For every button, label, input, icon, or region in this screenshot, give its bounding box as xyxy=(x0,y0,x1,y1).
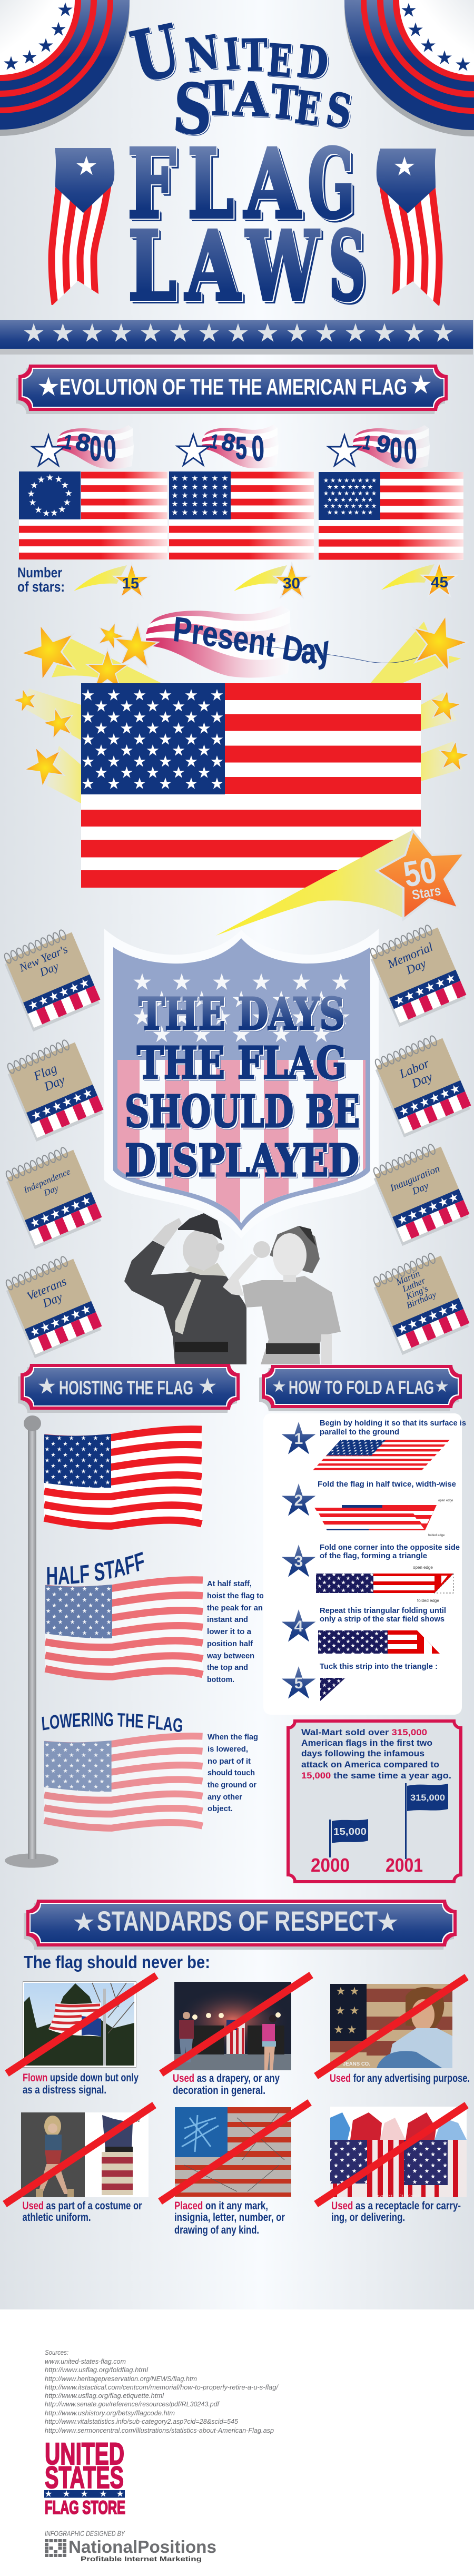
step 2: 2 xyxy=(294,1492,303,1509)
lowering the flag heading xyxy=(42,1713,203,1758)
left corner bunting xyxy=(0,0,130,136)
heading: standards of respect xyxy=(24,1900,457,1950)
title: Laws: A xyxy=(185,211,241,322)
panel: how to fold a flag xyxy=(263,1413,466,1715)
number of stars label: Number xyxy=(17,565,62,581)
half staff text: way between xyxy=(206,1651,254,1660)
designer credit: NationalPositions xyxy=(68,2537,216,2557)
callout: wal-mart flag sales xyxy=(288,1721,461,1882)
heading: how to fold a flag xyxy=(259,1365,462,1411)
notepad: Memorial Day xyxy=(367,922,468,1027)
half staff text: the peak for an xyxy=(207,1604,263,1613)
subheading: the flag should never be: The flag should never be: xyxy=(24,1952,210,1972)
notepad: Inauguration Day: Day xyxy=(410,1181,431,1197)
notepad: Independence Day: Independence xyxy=(22,1166,72,1195)
notepad: Inauguration Day: Inauguration xyxy=(388,1163,441,1194)
title: United States: S xyxy=(171,67,215,151)
sources list: http://www.ushistory.org/betsy/flagcode.htm xyxy=(45,2409,175,2417)
waving flag: hoisting xyxy=(44,1425,202,1530)
shooting star 30: 30 xyxy=(283,575,300,592)
step 1 xyxy=(282,1419,466,1470)
step 4 xyxy=(282,1606,446,1654)
half staff text xyxy=(206,1579,264,1684)
half staff text: hoist the flag to xyxy=(207,1591,264,1600)
photo: receptacle xyxy=(330,2107,467,2199)
flag pole xyxy=(5,1415,58,1868)
notepad: Independence Day xyxy=(3,1144,103,1249)
photo: flown upside down xyxy=(23,1982,136,2067)
number of stars label xyxy=(17,565,65,595)
notepad: New Year's Day: Day xyxy=(37,959,61,979)
logo: united states flag store: FLAG STORE xyxy=(45,2498,125,2518)
half staff heading: HALF STAFF xyxy=(47,1552,144,1585)
caption: flown upside down xyxy=(23,2072,139,2096)
sources list: http://www.usflag.org/foldflag.html xyxy=(45,2366,149,2374)
step 4: only a strip of the star field shows xyxy=(320,1615,445,1624)
logo: united states flag store xyxy=(44,2437,125,2518)
step 2: Fold the flag in half twice, width-wise xyxy=(318,1480,456,1489)
photo: costume: Style xyxy=(128,2116,141,2123)
present day streamer xyxy=(146,605,292,677)
logo: united states flag store: UNITED xyxy=(45,2437,124,2471)
step 3: folded edge xyxy=(417,1598,439,1603)
caption: receptacle xyxy=(331,2200,461,2224)
title: United States: N xyxy=(183,25,222,83)
title: Laws: S xyxy=(329,211,366,322)
year badge 1900: 0 xyxy=(403,430,418,471)
caption: drapery: Used as a drapery, or any xyxy=(173,2072,280,2085)
lowering the flag text: any other xyxy=(208,1793,242,1802)
half staff text: bottom. xyxy=(207,1675,234,1684)
half staff heading xyxy=(47,1552,202,1611)
caption: placed mark: Placed on it any mark, xyxy=(174,2200,268,2212)
shooting star 45 xyxy=(381,563,456,596)
lowering the flag text: object. xyxy=(208,1804,233,1813)
notepad: Flag Day: Flag xyxy=(31,1061,59,1084)
lowering the flag text: should touch xyxy=(208,1768,255,1777)
year badge 1850: 8 xyxy=(219,427,238,457)
title: Flag: F xyxy=(127,129,176,240)
title: Flag: A xyxy=(243,129,301,240)
caption: drapery xyxy=(173,2072,280,2097)
callout: wal-mart flag sales: Wal-Mart sold over 315,000 xyxy=(301,1727,427,1737)
star strip xyxy=(0,320,473,355)
caption: placed mark: insignia, letter, number, or xyxy=(174,2211,285,2224)
designer credit: Profitable Internet Marketing xyxy=(81,2555,202,2563)
50 stars shooting star xyxy=(216,830,465,936)
year badge 1850: 1 xyxy=(208,430,221,454)
left ribbon banner xyxy=(48,148,114,311)
caption: flown upside down: Flown upside down but only xyxy=(23,2072,139,2084)
sources list xyxy=(45,2348,279,2434)
year badge 1900: 0 xyxy=(390,430,402,469)
notepad: Martin Luther King's Birthday xyxy=(370,1250,471,1355)
step 3: of the flag, forming a triangle xyxy=(320,1551,427,1560)
step 1: parallel to the ground xyxy=(320,1428,399,1437)
sources list: Sources: xyxy=(45,2348,68,2356)
caption: placed mark xyxy=(174,2200,285,2236)
title: United States: E xyxy=(266,35,293,87)
lowering the flag heading: LOWERING THE FLAG xyxy=(42,1713,182,1732)
designer credit: INFOGRAPHIC DESIGNED BY xyxy=(45,2529,125,2538)
notepad: Labor Day: Labor xyxy=(397,1056,431,1081)
step 2: folded edge xyxy=(428,1534,445,1537)
step 5 xyxy=(282,1662,438,1701)
year badge 1800: 1 xyxy=(61,431,74,454)
sources list: http://www.senate.gov/reference/resources/pdf/RL30243.pdf xyxy=(45,2400,220,2408)
year badge 1800 xyxy=(33,425,134,469)
caption: placed mark: drawing of any kind. xyxy=(174,2224,259,2236)
notepad: New Year's Day: New Year's xyxy=(17,942,70,975)
title: Flag xyxy=(127,129,355,240)
sources list: www.united-states-flag.com xyxy=(45,2357,126,2365)
step 2: open edge xyxy=(438,1499,453,1502)
lowering the flag text: no part of it xyxy=(208,1757,251,1766)
callout: wal-mart flag sales: 15,000 the same time a year ago. xyxy=(301,1771,451,1781)
notepad: Inauguration Day xyxy=(370,1141,471,1246)
bar flag 2001 xyxy=(386,1783,448,1876)
shield: the days the flag should be displayed xyxy=(104,929,379,1239)
prohibition slashes xyxy=(5,1975,467,2204)
notepad: Flag Day: Day xyxy=(42,1073,67,1094)
present day heading xyxy=(174,616,418,670)
photo: advertising xyxy=(330,1984,452,2068)
notepad: Martin Luther King's Birthday: Martin xyxy=(394,1269,421,1287)
year badge 1800: 8 xyxy=(73,427,93,457)
waving flag: lowering xyxy=(44,1733,202,1832)
year badge 1900: 9 xyxy=(373,429,393,459)
notepad: Veterans Day: Day xyxy=(40,1290,65,1310)
caption: costume xyxy=(22,2200,142,2224)
star cluster trails xyxy=(21,622,462,803)
designer credit xyxy=(45,2529,216,2563)
heading: hoisting the flag xyxy=(18,1364,240,1413)
bar flag 2001: 315,000 xyxy=(410,1793,445,1803)
photo: receptacle: Copyright © Jim Corwin xyxy=(373,2194,421,2199)
lowering the flag text: the ground or xyxy=(208,1781,256,1790)
caption: costume: athletic uniform. xyxy=(22,2211,91,2224)
title: United States: T xyxy=(242,30,268,81)
shield: the days the flag should be displayed: DISPLAYED xyxy=(125,1135,359,1186)
shield: the days the flag should be displayed: SHOULD BE xyxy=(125,1086,360,1137)
notepad: Memorial Day: Memorial xyxy=(385,940,434,971)
half staff text: At half staff, xyxy=(207,1579,252,1588)
notepad: Veterans Day: Veterans xyxy=(25,1274,68,1303)
saluting children photo xyxy=(124,1213,341,1364)
step 3 xyxy=(282,1543,460,1603)
title: United States xyxy=(124,9,355,151)
shooting star 45: 45 xyxy=(431,574,448,591)
step 4: Repeat this triangular folding until xyxy=(320,1606,446,1615)
heading: hoisting the flag: HOISTING THE FLAG xyxy=(59,1377,193,1399)
bar flag 2000: 2000 xyxy=(311,1854,350,1876)
year badge 1900: 1 xyxy=(361,431,373,455)
caption: drapery: decoration in general. xyxy=(173,2085,265,2097)
year badge 1850: 5 xyxy=(235,430,247,466)
photo: costume xyxy=(21,2112,149,2197)
flag 1900 xyxy=(319,472,463,560)
notepad: Martin Luther King's Birthday: Birthday xyxy=(405,1289,438,1311)
notepad: Veterans Day xyxy=(3,1253,103,1358)
callout: wal-mart flag sales: days following the infamous xyxy=(301,1748,424,1758)
year badge 1800: 0 xyxy=(103,428,117,469)
sources list: http://www.heritagepreservation.org/NEWS/flag.htm xyxy=(45,2375,197,2383)
callout: wal-mart flag sales: attack on America compared to xyxy=(301,1759,439,1769)
title: United States: U xyxy=(124,9,187,99)
bar flag 2000: 15,000 xyxy=(333,1826,367,1837)
flag 1800 xyxy=(19,471,167,559)
step 4: 4 xyxy=(294,1618,303,1635)
title: United States: A xyxy=(232,71,270,127)
lowering the flag text: When the flag xyxy=(208,1733,258,1742)
title: United States: S xyxy=(323,83,355,139)
bar flag 2000 xyxy=(311,1819,368,1876)
sources list: http://www.usflag.org/flag.etiquette.html xyxy=(45,2392,164,2400)
step 2 xyxy=(282,1480,456,1537)
caption: receptacle: ing, or delivering. xyxy=(331,2211,405,2224)
year badge 1900 xyxy=(329,425,430,471)
50 stars shooting star: Stars xyxy=(411,882,442,903)
shield: the days the flag should be displayed: THE DAYS xyxy=(139,988,345,1040)
half staff text: instant and xyxy=(207,1615,248,1624)
flag 1850 xyxy=(169,471,314,559)
step 1: Begin by holding it so that its surface is xyxy=(320,1419,466,1428)
photo: advertising: JEANS CO. xyxy=(343,2061,370,2067)
gold stars xyxy=(12,608,473,790)
step 5: Tuck this strip into the triangle : xyxy=(320,1662,438,1671)
notepad: Labor Day xyxy=(372,1033,472,1137)
notepad: Martin Luther King's Birthday: Luther xyxy=(400,1275,427,1294)
title: Laws xyxy=(128,211,366,322)
sources list: http://www.itstactical.com/centcom/memorial/how-to-properly-retire-a-u-s-flag/ xyxy=(45,2383,279,2391)
logo: united states flag store: STATES xyxy=(45,2461,124,2495)
notepad: Flag Day xyxy=(4,1037,105,1142)
title: Laws: W xyxy=(245,211,320,322)
title: United States: I xyxy=(222,29,242,80)
present day flag xyxy=(81,683,421,888)
notepad: Labor Day: Day xyxy=(409,1070,434,1091)
present day heading: Present Day xyxy=(174,616,329,670)
shield: the days the flag should be displayed: THE FLAG xyxy=(137,1037,347,1089)
lowering the flag text: is lowered, xyxy=(208,1745,248,1754)
lowering the flag text xyxy=(208,1733,258,1813)
title: Laws: L xyxy=(128,211,176,322)
sources list: http://www.sermoncentral.com/illustrations/statistics-about-American-Flag.asp xyxy=(45,2426,274,2434)
title: United States: T xyxy=(269,75,300,130)
step 5: 5 xyxy=(294,1675,303,1692)
notepad: Martin Luther King's Birthday: King's xyxy=(404,1283,430,1302)
half staff text: the top and xyxy=(207,1663,248,1672)
year badge 1850: 0 xyxy=(251,428,265,469)
photo: concert drapery xyxy=(174,1982,291,2070)
caption: costume: Used as part of a costume or xyxy=(22,2200,142,2212)
right corner bunting xyxy=(344,0,474,136)
boy xyxy=(124,1213,246,1364)
heading: standards of respect: STANDARDS OF RESPECT xyxy=(97,1906,378,1937)
half staff text: position half xyxy=(207,1639,253,1648)
shooting star 30 xyxy=(234,564,309,597)
shooting star 15 xyxy=(74,564,149,597)
right ribbon banner xyxy=(377,149,442,311)
title: Flag: L xyxy=(187,129,234,240)
title: Flag: G xyxy=(308,129,355,240)
callout: wal-mart flag sales: American flags in the first two xyxy=(301,1738,432,1748)
sources list: http://www.vitalstatistics.info/sub-category2.asp?cid=28&scid=545 xyxy=(45,2417,239,2425)
year badge 1850 xyxy=(177,425,279,469)
notepad: Memorial Day: Day xyxy=(404,957,428,977)
step 3: 3 xyxy=(294,1553,303,1570)
waving flag: half staff xyxy=(45,1576,203,1680)
year badge 1800: 0 xyxy=(90,429,102,468)
title: United States: T xyxy=(204,70,234,126)
title: United States: D xyxy=(295,36,331,90)
girl xyxy=(223,1226,341,1364)
notepad: Independence Day: Day xyxy=(42,1183,60,1198)
shooting star 15: 15 xyxy=(122,575,139,592)
step 1: 1 xyxy=(294,1430,303,1448)
caption: flown upside down: as a distress signal. xyxy=(23,2084,106,2096)
50 stars shooting star: 50 xyxy=(400,850,440,895)
photo: placed mark xyxy=(175,2107,291,2197)
bar flag 2001: 2001 xyxy=(386,1854,423,1876)
heading: evolution of the american flag xyxy=(16,365,448,414)
step 3: open edge xyxy=(413,1565,433,1570)
notepad: New Year's Day xyxy=(1,927,102,1031)
title: United States: E xyxy=(293,81,323,135)
step 3: Fold one corner into the opposite side xyxy=(320,1543,460,1552)
half staff text: lower it to a xyxy=(207,1627,252,1636)
number of stars label: of stars: xyxy=(17,579,65,595)
